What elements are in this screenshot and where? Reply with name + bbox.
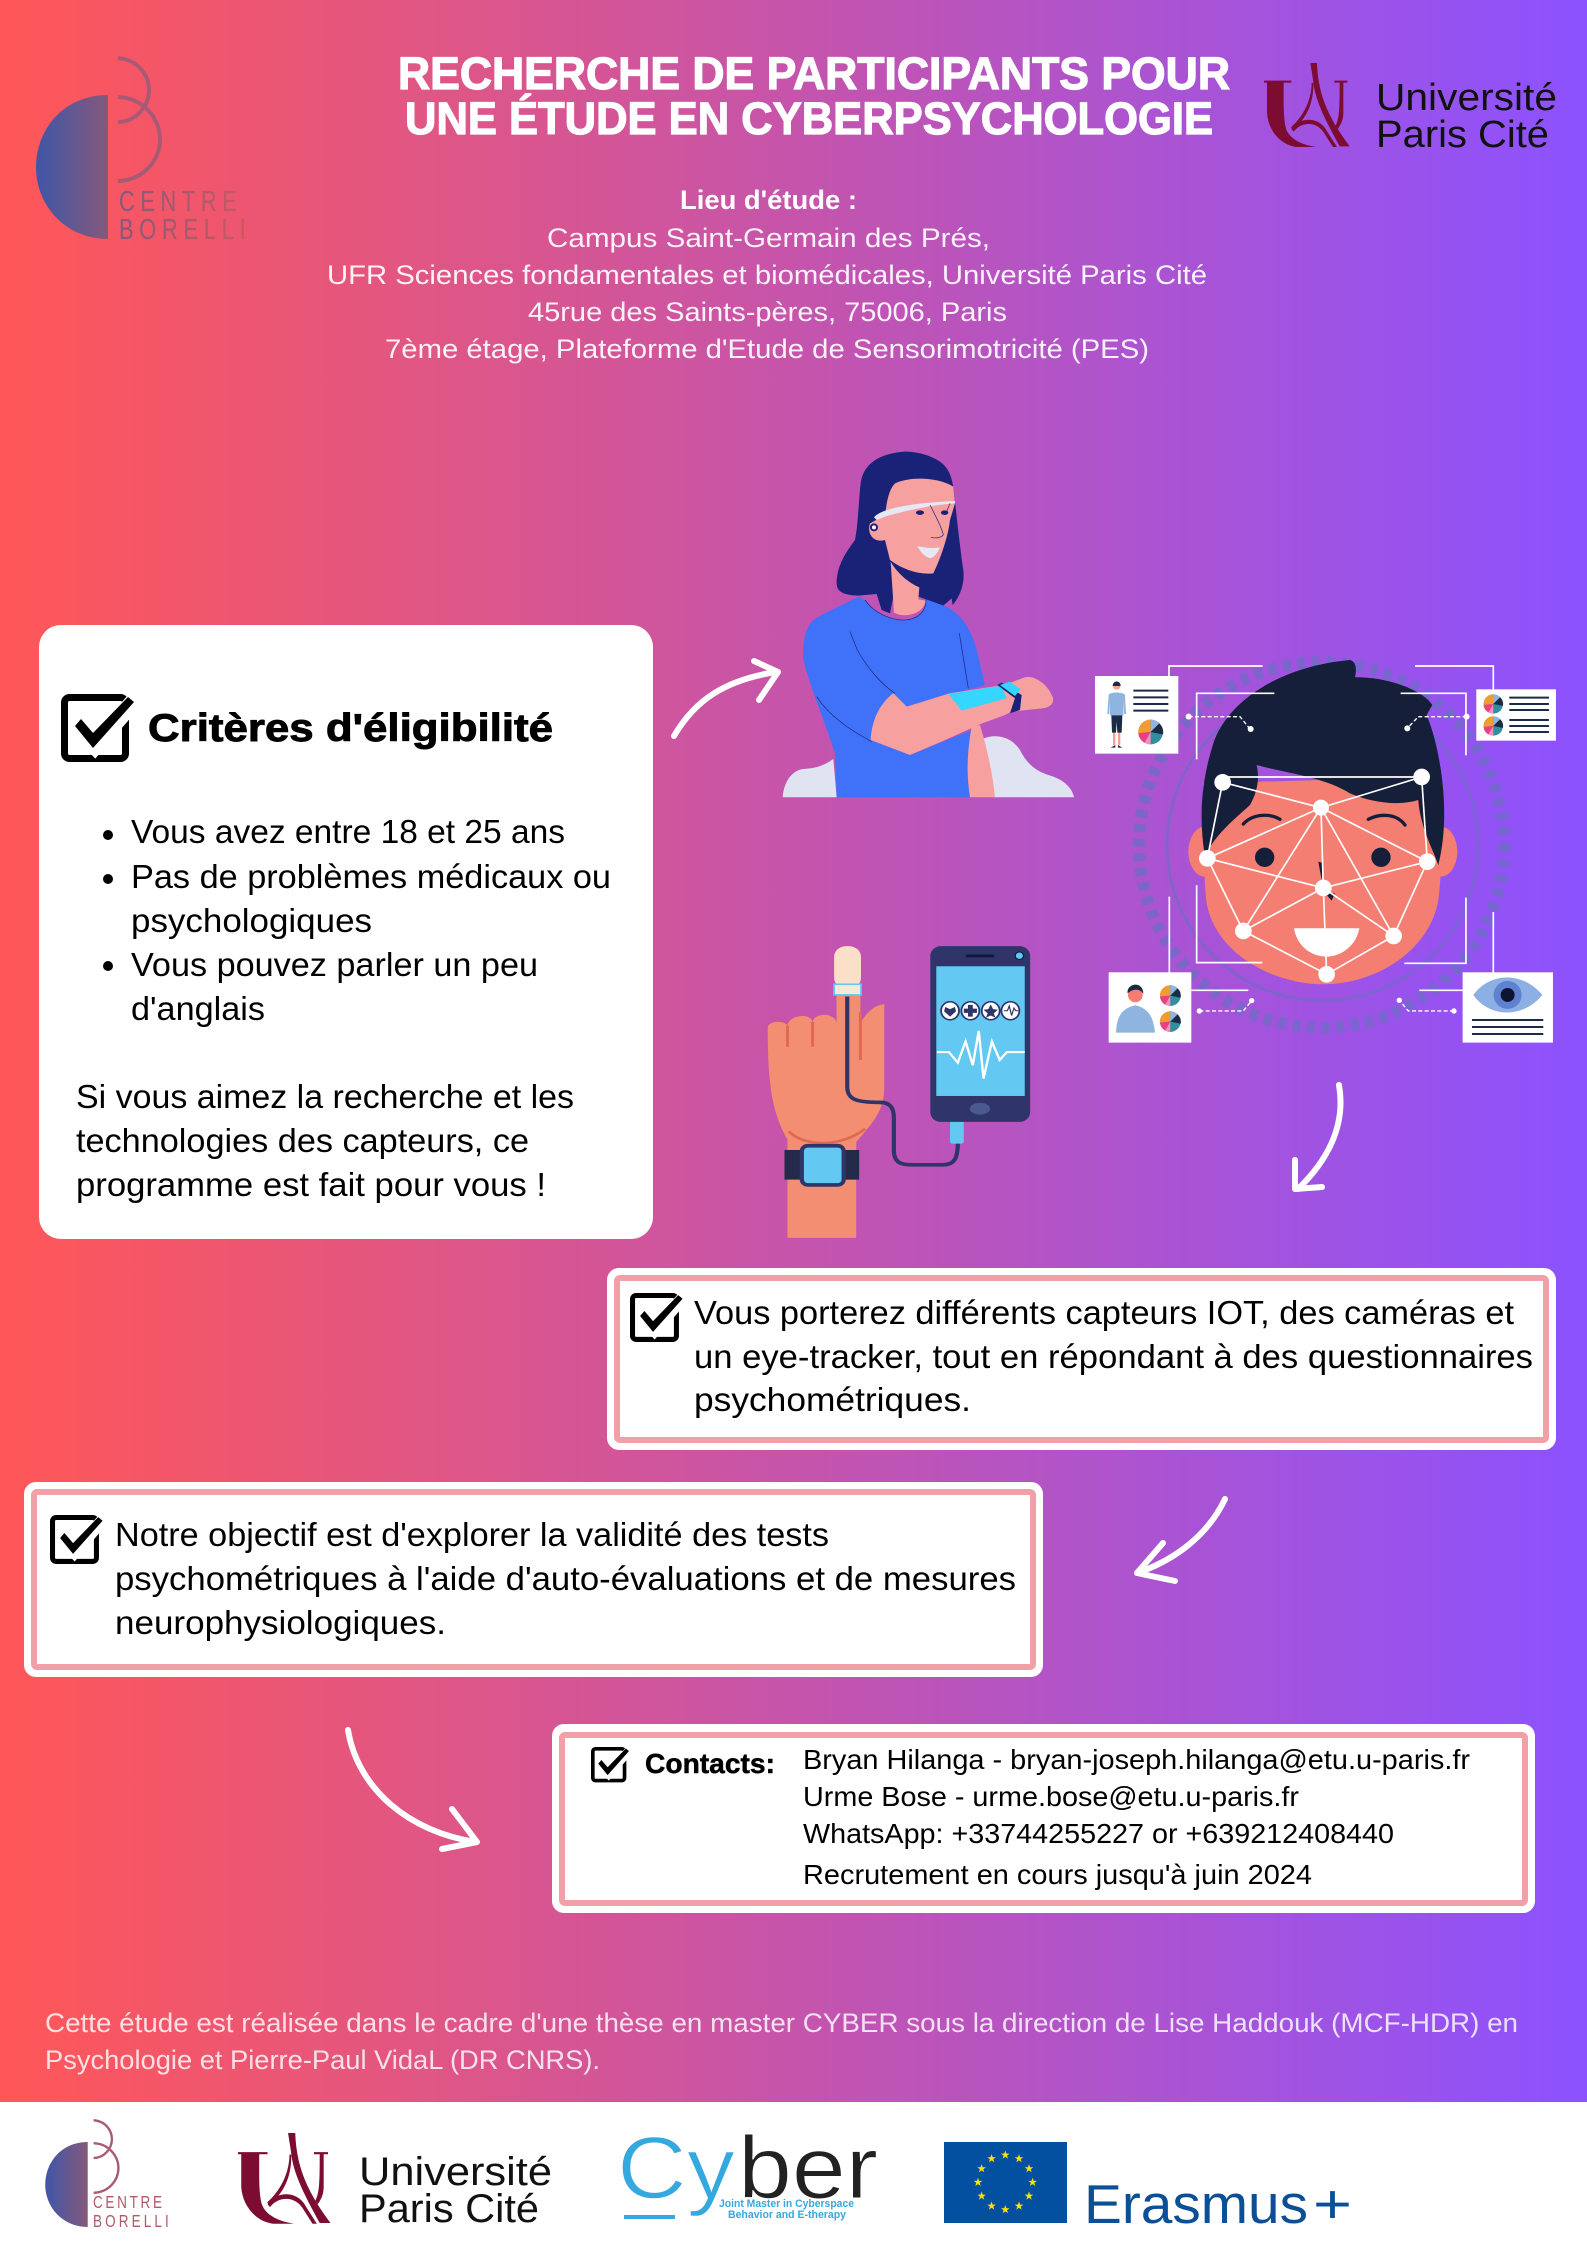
footer logo band <box>0 2102 1587 2245</box>
eligibility list: Vous avez entre 18 et 25 ans <box>131 813 565 850</box>
panel: contacts <box>552 1724 1535 1913</box>
sensors text: un eye-tracker, tout en répondant à des questionnaires <box>694 1338 1533 1375</box>
study location text: Campus Saint-Germain des Prés, <box>547 223 990 253</box>
objective text: psychométriques à l'aide d'auto-évaluations et de mesures <box>115 1560 1016 1597</box>
data card: portrait <box>1109 972 1191 1043</box>
footer logo: Université Paris Cité: Paris Cité <box>359 2187 539 2231</box>
title: RECHERCHE DE PARTICIPANTS POUR <box>398 48 1230 99</box>
footnote text: Cette étude est réalisée dans le cadre d'une thèse en master CYBER sous la direction de Lise Haddouk (MCF-HDR) en <box>45 2008 1518 2038</box>
illustration: finger sensor, smartwatch and phone <box>768 946 1030 1238</box>
eligibility list: psychologiques <box>131 902 372 939</box>
contacts details: Urme Bose - urme.bose@etu.u-paris.fr <box>803 1781 1299 1812</box>
footer logo: Cyber: Cy <box>617 2118 735 2217</box>
data card: eye tracking <box>1463 972 1553 1043</box>
eligibility list <box>103 813 611 1027</box>
icon: checkbox <box>53 1517 103 1561</box>
eligibility list: d'anglais <box>131 990 265 1027</box>
panel: sensors text box <box>607 1268 1556 1450</box>
title <box>398 48 1230 144</box>
study location text: Lieu d'étude : <box>680 185 857 215</box>
footnote text: Psychologie et Pierre-Paul VidaL (DR CNRS). <box>45 2045 600 2075</box>
panel: objective text box <box>24 1482 1043 1677</box>
data card: charts top right <box>1476 689 1556 741</box>
contacts details: Recrutement en cours jusqu'à juin 2024 <box>803 1859 1312 1890</box>
arrow: face to sensors box <box>1295 1085 1341 1189</box>
invitation paragraph: technologies des capteurs, ce <box>76 1122 529 1159</box>
arrow: objective to contacts <box>348 1730 477 1849</box>
eligibility list: Vous pouvez parler un peu <box>131 946 538 983</box>
footer logo: Centre Borelli: BORELLI <box>93 2212 169 2232</box>
footer logo: Université Paris Cité: Université <box>359 2150 552 2194</box>
arrow: to wearable person <box>674 661 778 736</box>
logo: Centre Borelli: CENTRE <box>119 186 237 218</box>
logo: Centre Borelli <box>36 58 246 246</box>
objective text <box>115 1516 1016 1641</box>
footnote text <box>45 2008 1518 2075</box>
data card: body profile <box>1095 676 1178 754</box>
study location text: 45rue des Saints-pères, 75006, Paris <box>528 297 1007 327</box>
arrow: sensors to objective <box>1137 1499 1225 1581</box>
icon: checkbox <box>593 1749 629 1781</box>
contacts details <box>803 1744 1470 1890</box>
logo: Centre Borelli: BORELLI <box>119 214 246 246</box>
heading: eligibility: Critères d'éligibilité <box>148 707 553 750</box>
contacts details: Bryan Hilanga - bryan-joseph.hilanga@etu.u-paris.fr <box>803 1744 1470 1775</box>
footer logo: Erasmus+ with EU flag: Erasmus <box>1084 2173 1308 2235</box>
logo: Université Paris Cité: Paris Cité <box>1376 114 1549 156</box>
footer logo: Université Paris Cité <box>238 2133 552 2231</box>
study location text <box>327 185 1207 364</box>
sensors text: Vous porterez différents capteurs IOT, des caméras et <box>694 1294 1514 1331</box>
logo: Université Paris Cité: Université <box>1376 77 1557 119</box>
contacts label: Contacts: <box>645 1748 775 1779</box>
sensors text <box>694 1294 1533 1418</box>
objective text: neurophysiologiques. <box>115 1604 446 1641</box>
title: UNE ÉTUDE EN CYBERPSYCHOLOGIE <box>405 93 1213 144</box>
sensors text: psychométriques. <box>694 1381 971 1418</box>
footer logo: Centre Borelli: CENTRE <box>93 2193 162 2213</box>
illustration: person wearing smart glasses and sensor <box>783 452 1074 797</box>
invitation paragraph: programme est fait pour vous ! <box>76 1166 546 1203</box>
footer logo: Cyber: Behavior and E-therapy <box>728 2209 847 2221</box>
contacts details: WhatsApp: +33744255227 or +639212408440 <box>803 1818 1394 1849</box>
footer logo: Cyber: ber <box>738 2118 878 2217</box>
objective text: Notre objectif est d'explorer la validité des tests <box>115 1516 829 1553</box>
icon: heading checkbox <box>64 697 134 758</box>
invitation paragraph <box>76 1078 574 1203</box>
footer logo: Erasmus+ with EU flag: + <box>1313 2173 1352 2235</box>
footer logo: Cyber <box>617 2118 878 2221</box>
footer logo: Cyber: Joint Master in Cyberspace <box>719 2198 854 2210</box>
invitation paragraph: Si vous aimez la recherche et les <box>76 1078 574 1115</box>
study location text: UFR Sciences fondamentales et biomédicales, Université Paris Cité <box>327 260 1207 290</box>
panel: eligibility criteria <box>39 625 653 1239</box>
logo: Université Paris Cité <box>1264 63 1557 156</box>
study location text: 7ème étage, Plateforme d'Etude de Sensorimotricité (PES) <box>385 334 1149 364</box>
eligibility list: Pas de problèmes médicaux ou <box>131 858 611 895</box>
illustration: face recognition mesh with data cards <box>1095 660 1556 1043</box>
footer logo: Centre Borelli <box>45 2120 169 2232</box>
footer logo: Erasmus+ with EU flag <box>944 2142 1352 2235</box>
icon: checkbox <box>633 1295 683 1339</box>
